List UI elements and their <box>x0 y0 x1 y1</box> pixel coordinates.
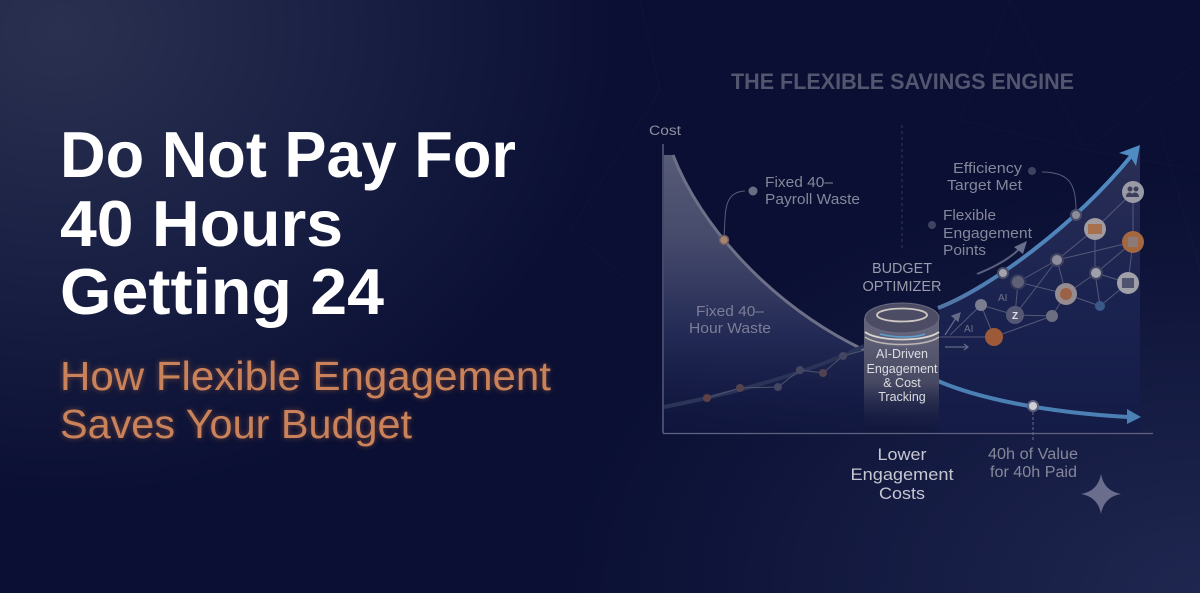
cylinder text <box>866 347 938 404</box>
small arrows <box>945 241 1027 350</box>
subtitle <box>60 353 552 447</box>
label: lower costs <box>850 446 954 503</box>
y axis <box>662 144 664 433</box>
AI labels <box>964 293 1007 335</box>
chart heading: THE FLEXIBLE SAVINGS ENGINE <box>731 69 1074 94</box>
divider <box>901 125 903 250</box>
callout: efficiency: Efficiency <box>953 160 1023 177</box>
callout: value: for 40h Paid <box>990 464 1077 481</box>
falling waste curve <box>673 155 864 350</box>
label: fixed hour waste <box>689 303 771 337</box>
label: fixed hour waste: Hour Waste <box>689 320 771 337</box>
title: Getting 24 <box>60 255 384 328</box>
label: lower costs: Lower <box>878 446 927 464</box>
callout: value: 40h of Value <box>988 446 1078 463</box>
area under rising curve <box>939 147 1140 433</box>
callout: flexible points: Points <box>943 242 986 259</box>
small trend line <box>707 350 865 398</box>
baseline rising band <box>664 346 864 407</box>
arrowhead up <box>1119 145 1140 166</box>
cylinder text: Tracking <box>878 390 926 404</box>
cylinder text: & Cost <box>883 376 921 390</box>
label: fixed hour waste: Fixed 40– <box>696 303 765 320</box>
AI labels: AI <box>964 324 973 335</box>
label: lower costs: Engagement <box>850 466 954 484</box>
chart: savings engine <box>649 123 1153 503</box>
callout: payroll waste: Fixed 40– <box>765 174 834 191</box>
area: fixed waste <box>664 155 864 433</box>
title: Do Not Pay For <box>60 118 516 191</box>
AI labels: AI <box>998 293 1007 304</box>
title <box>60 118 516 328</box>
callout: efficiency: Target Met <box>947 177 1023 194</box>
subtitle: Saves Your Budget <box>60 401 413 447</box>
subtitle: Saves Your Budget <box>60 401 413 447</box>
cylinder text: AI-Driven <box>876 347 928 361</box>
network edges <box>940 192 1133 337</box>
cylinder: budget optimizer <box>864 303 939 426</box>
label: budget optimizer <box>862 260 942 295</box>
rising blue curve <box>938 155 1132 308</box>
arrowhead right <box>1127 409 1141 424</box>
falling blue curve <box>938 381 1128 417</box>
trend nodes <box>703 352 847 402</box>
y axis label: Cost <box>649 123 681 138</box>
label: lower costs: Costs <box>879 485 925 503</box>
callout: efficiency <box>947 160 1076 210</box>
cylinder text: Engagement <box>866 362 938 376</box>
icon: sparkle <box>1081 474 1121 514</box>
callout: flexible points <box>928 207 1033 259</box>
callout: payroll waste <box>724 174 860 236</box>
callout: value <box>988 412 1078 481</box>
label: budget optimizer: BUDGET <box>872 260 932 277</box>
label: budget optimizer: OPTIMIZER <box>862 278 942 295</box>
subtitle: How Flexible Engagement <box>60 353 552 399</box>
callout: payroll waste: Payroll Waste <box>765 191 860 208</box>
callout: flexible points: Flexible <box>943 207 996 224</box>
Z node label: Z <box>1012 311 1018 322</box>
subtitle: How Flexible Engagement <box>60 353 552 399</box>
title: 40 Hours <box>60 187 343 260</box>
network nodes <box>975 181 1144 346</box>
callout: flexible points: Engagement <box>943 225 1033 242</box>
x axis <box>663 432 1153 434</box>
callout nodes on curves <box>720 210 1081 411</box>
